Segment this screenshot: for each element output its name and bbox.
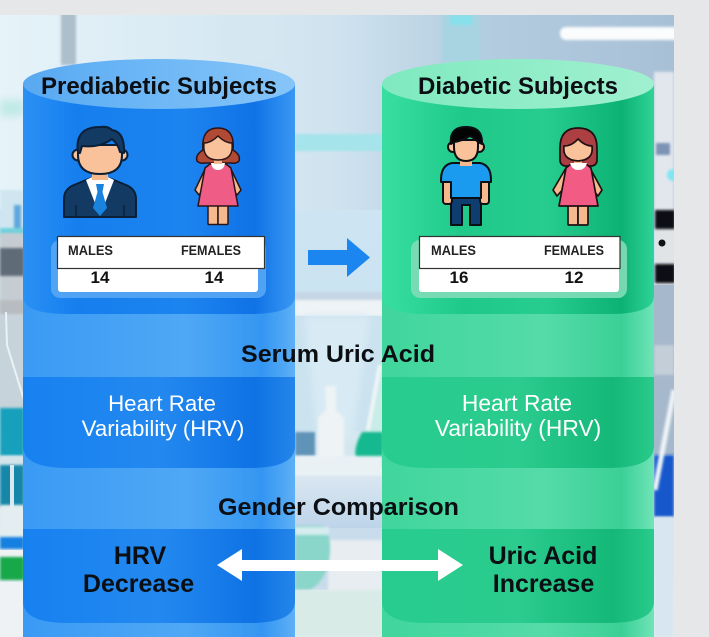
table: diabetic counts: 16 [450, 268, 468, 287]
table: prediabetic counts: FEMALES [181, 243, 241, 258]
table: diabetic counts: MALES [431, 243, 476, 258]
text: heart rate variability, diabetic: Heart Rate [462, 390, 572, 416]
band: heart rate variability [382, 377, 654, 468]
band: heart rate variability [23, 377, 295, 468]
column top cap [23, 59, 295, 109]
heading: diabetic subjects: Diabetic Subjects [418, 73, 618, 100]
table: prediabetic counts [51, 236, 266, 298]
text: heart rate variability, diabetic: Variability (HRV) [435, 415, 601, 441]
panel: prediabetic column [23, 59, 295, 637]
heading: serum uric acid: Serum Uric Acid [241, 341, 435, 368]
table: diabetic counts: 12 [565, 268, 583, 287]
band: gender comparison results [23, 529, 295, 623]
text: hrv decrease: Decrease [83, 570, 194, 598]
heading: prediabetic subjects: Prediabetic Subjects [41, 73, 277, 100]
table: prediabetic counts: MALES [68, 243, 113, 258]
icon: woman in pink dress [195, 128, 241, 224]
arrow: double-headed comparison [217, 549, 463, 581]
panel: diabetic column [382, 59, 654, 637]
text: uric acid increase: Increase [493, 570, 594, 598]
right side machine [654, 72, 674, 212]
icon: man in suit [64, 127, 136, 217]
column top cap [382, 59, 654, 109]
heading: gender comparison: Gender Comparison [218, 494, 459, 521]
left side flask [0, 300, 24, 410]
table: diabetic counts: FEMALES [544, 243, 604, 258]
icon: man in blue t-shirt [441, 127, 491, 225]
text: hrv decrease: HRV [114, 542, 166, 570]
middle bottle and bench [305, 316, 370, 440]
table: prediabetic counts: 14 [205, 268, 224, 287]
icon: woman with long hair [553, 128, 602, 225]
column upper body [382, 84, 654, 314]
arrow: prediabetic to diabetic [308, 238, 370, 277]
text: uric acid increase: Uric Acid [489, 542, 597, 570]
column upper body [23, 84, 295, 314]
table: diabetic counts [411, 236, 627, 298]
table: prediabetic counts: 14 [91, 268, 110, 287]
text: heart rate variability, prediabetic: Variability (HRV) [82, 416, 244, 441]
column bottom lighter body [23, 84, 295, 637]
column bottom lighter body [382, 84, 654, 637]
text: heart rate variability, prediabetic: Heart Rate [108, 391, 216, 416]
band: gender comparison results [382, 529, 654, 623]
